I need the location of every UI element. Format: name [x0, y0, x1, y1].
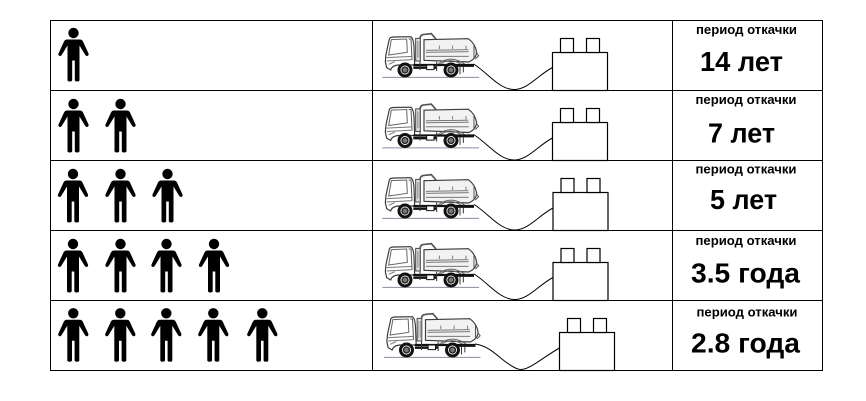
icons: four people [58, 239, 229, 292]
icons: two people [58, 99, 136, 152]
row 4: four people, 3.5 years [58, 234, 800, 300]
icon: septic truck [382, 104, 479, 148]
hose [474, 204, 553, 230]
value: 3.5 years: 3.5 года [691, 258, 800, 289]
icons: three people [58, 169, 183, 222]
hose [474, 274, 553, 300]
value: 14 years: 14 лет [700, 46, 783, 77]
label: pumping period: период откачки [696, 162, 796, 176]
value: 7 years: 7 лет [708, 117, 775, 148]
row 3: three people, 5 years [58, 162, 796, 230]
hose [474, 134, 552, 160]
icon: septic truck [382, 34, 479, 77]
label: pumping period: период откачки [696, 23, 797, 37]
icons: five people [58, 308, 277, 362]
row 2: two people, 7 years [58, 93, 796, 160]
row 5: five people, 2.8 years [58, 306, 800, 370]
hose [474, 64, 552, 90]
icon: septic truck [382, 244, 479, 287]
septic tank [553, 248, 608, 300]
hose [475, 344, 560, 370]
septic tank [552, 38, 608, 90]
icon: septic truck [382, 175, 479, 218]
icon: person [58, 28, 89, 82]
septic tank [560, 318, 614, 370]
value: 2.8 years: 2.8 года [691, 328, 800, 358]
row 1: one person, 14 years [58, 23, 797, 90]
label: pumping period: период откачки [696, 306, 798, 320]
icon: septic truck [384, 314, 480, 357]
label: pumping period: период откачки [696, 93, 796, 107]
label: pumping period: период откачки [696, 234, 796, 248]
septic tank [552, 108, 608, 160]
value: 5 years: 5 лет [710, 184, 777, 215]
septic tank [553, 178, 608, 230]
table grid [50, 20, 823, 371]
